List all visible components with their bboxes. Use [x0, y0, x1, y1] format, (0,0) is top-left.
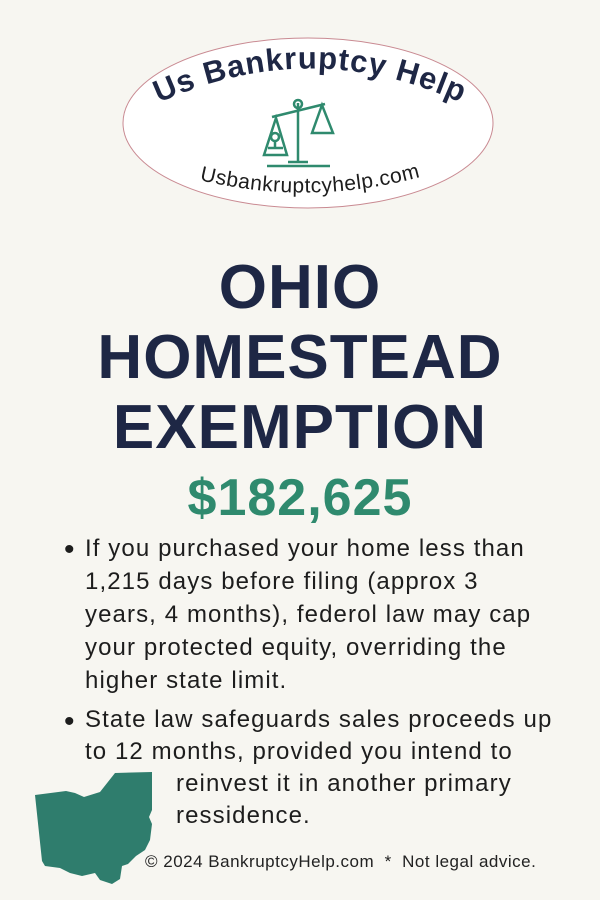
- text: EXEMPTION: [113, 393, 487, 462]
- text: HOMESTEAD: [97, 323, 503, 392]
- bullet 1: your protected equity, overriding the: [85, 634, 507, 661]
- bullet 2: reinvest it in another primary: [176, 770, 512, 797]
- footer: © 2024 BankruptcyHelp.com * Not legal advice.: [145, 852, 536, 871]
- logo title: Us Bankruptcy Help: [152, 48, 464, 104]
- icon: Ohio map: [35, 772, 152, 884]
- amount: $182,625: [188, 469, 412, 527]
- text: OHIO: [219, 253, 381, 322]
- bullet 1: If you purchased your home less than: [85, 535, 525, 562]
- logo: [122, 38, 494, 208]
- bullet 1: •: [64, 533, 75, 566]
- icon: scales: [264, 100, 333, 166]
- bullet 1: higher state limit.: [85, 667, 287, 694]
- bullet 2: [64, 705, 552, 829]
- bullet 1: [64, 533, 531, 694]
- bullet 1: 1,215 days before filing (approx 3: [85, 568, 479, 595]
- bullet 2: •: [64, 705, 75, 738]
- bullet 2: ressidence.: [176, 802, 311, 829]
- title: [97, 253, 503, 462]
- bullet 2: State law safeguards sales proceeds up: [85, 706, 552, 733]
- logo url: Usbankruptcyhelp.com: [202, 166, 419, 197]
- bullet 1: years, 4 months), federol law may cap: [85, 601, 531, 628]
- bullet 2: to 12 months, provided you intend to: [85, 738, 513, 765]
